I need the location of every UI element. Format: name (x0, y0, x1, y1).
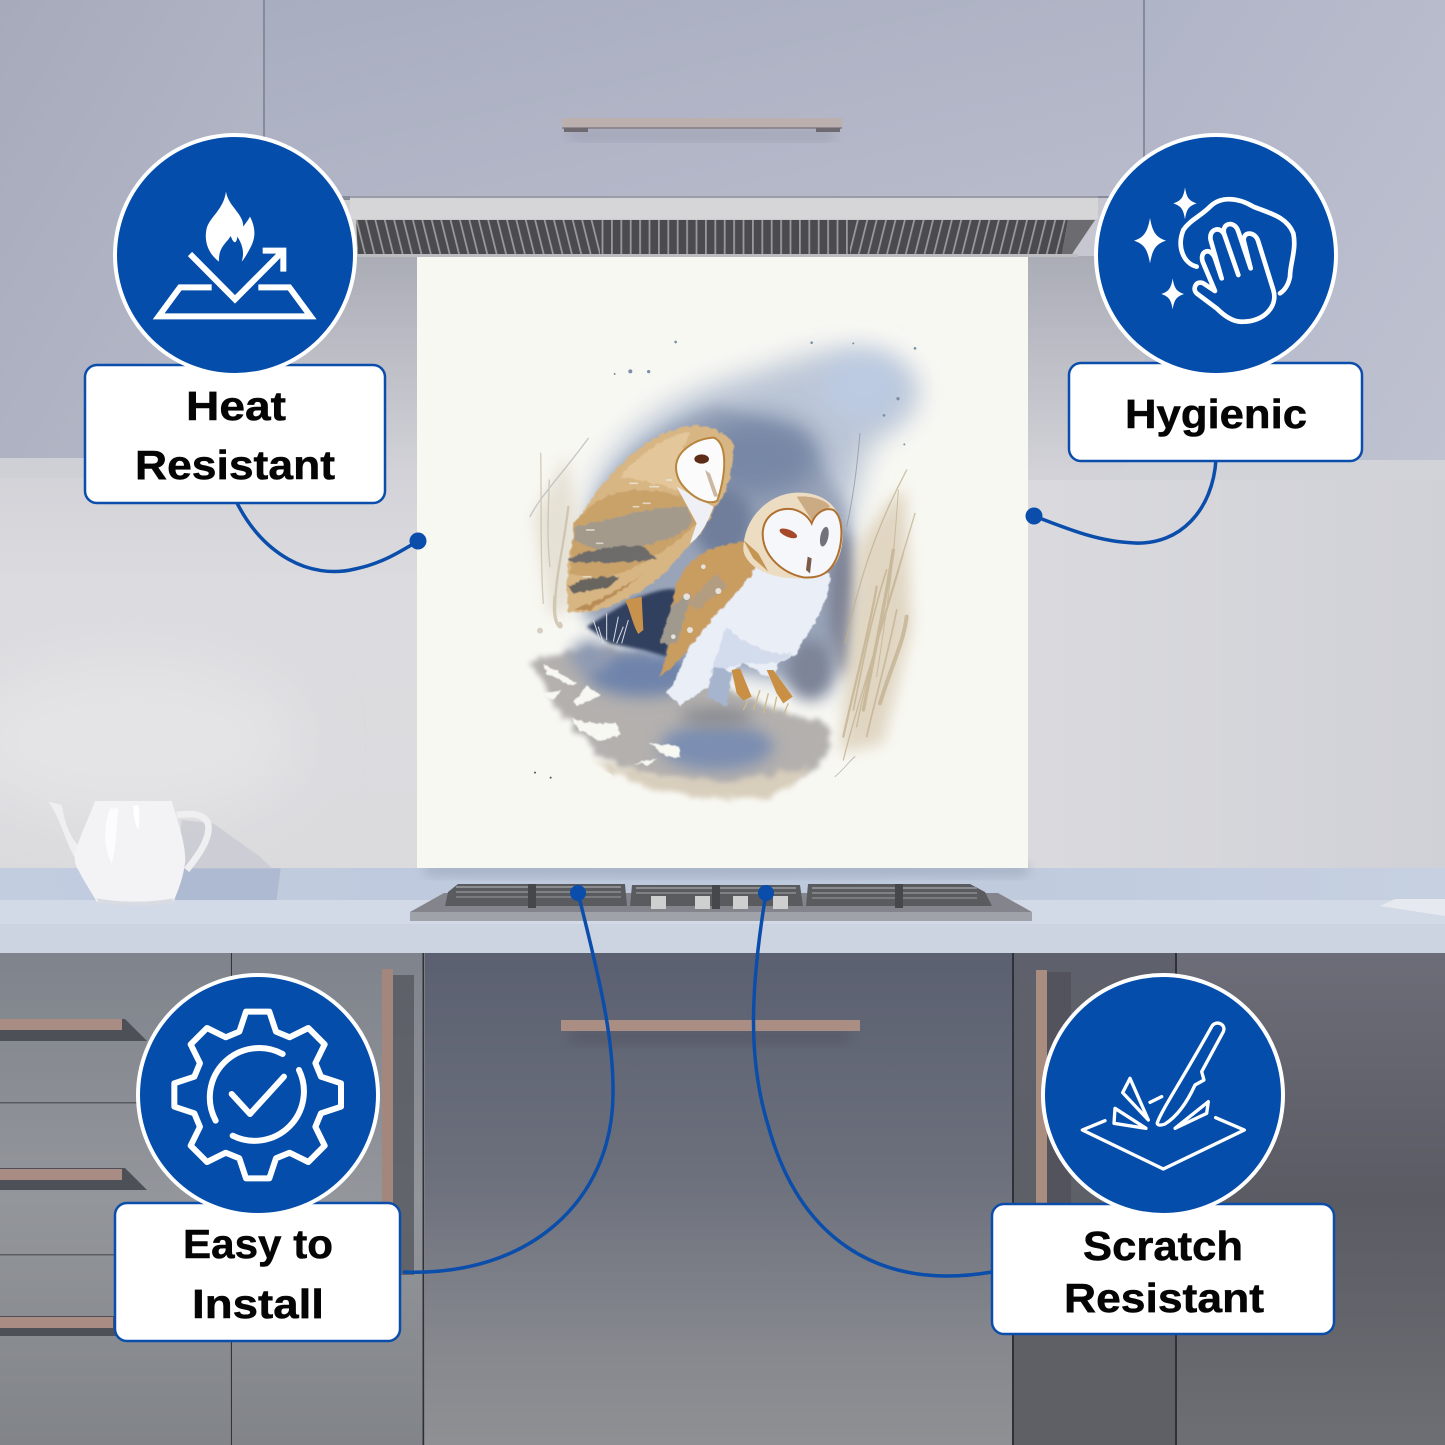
reeds right (835, 433, 915, 777)
front owl eyes (778, 526, 798, 540)
feature: scratch resistant (992, 975, 1334, 1334)
reed wash left (533, 453, 578, 617)
feature: easy to install (115, 975, 400, 1341)
dark wash (693, 417, 820, 497)
back wall (0, 250, 1445, 870)
connector: hygienic (1026, 459, 1216, 543)
grass tuft (585, 613, 628, 643)
cabinet gap (260, 0, 1150, 200)
badge circle (115, 135, 355, 375)
pan supports (528, 884, 536, 908)
teapot body (75, 801, 185, 904)
upper right blue (820, 353, 907, 420)
badge circle (1043, 975, 1283, 1215)
connector: easy to install (403, 885, 613, 1272)
teapot shadow (175, 820, 281, 900)
icon: knife on scratched surface (1082, 1023, 1244, 1169)
soft light on the wall (0, 660, 300, 820)
heading line 2: Install (192, 1281, 324, 1327)
sky wash (580, 352, 917, 693)
burners and grates (445, 884, 627, 906)
reed wash right (840, 487, 912, 753)
hob plate (410, 893, 1032, 921)
vertical handle right (1036, 970, 1047, 1204)
lower cabinet far right (1177, 953, 1445, 1445)
hood vent grille (356, 220, 600, 254)
back owl grey wing bands (573, 507, 693, 552)
heading: Hygienic (1125, 391, 1307, 437)
paper highlights on ground (540, 663, 680, 783)
dark hollow under owl (587, 589, 677, 657)
front owl head (743, 493, 843, 579)
paper (417, 257, 1028, 868)
splashback panel with owl painting (417, 257, 1028, 876)
heading: Easy to (183, 1221, 333, 1267)
drawer handles (0, 1019, 147, 1041)
back owl leg (625, 597, 643, 634)
upper cabinet right (1145, 0, 1445, 460)
teapot spout (48, 802, 80, 862)
back owl mid wing (570, 490, 697, 577)
front owl wing (660, 542, 756, 677)
badge circle (138, 975, 378, 1215)
dense wash behind owls (583, 407, 850, 683)
lower cabinet second door (232, 953, 423, 1445)
panel shadow (425, 862, 1028, 876)
wing spots (671, 564, 721, 639)
front owl (660, 542, 830, 707)
back owl (567, 426, 734, 612)
counter upstand (0, 868, 1445, 901)
gas hob (410, 884, 1032, 921)
front owl beak (806, 557, 812, 573)
reeds left (530, 438, 588, 627)
paint splatter (534, 341, 916, 779)
back owl upper back (620, 432, 690, 493)
back owl body (567, 426, 734, 612)
heading line 2: Resistant (135, 442, 335, 488)
grass at feet (743, 690, 788, 715)
upper cabinet shelf right (1110, 460, 1445, 480)
icon: gear with check mark (174, 1012, 341, 1178)
worktop edge piece (1380, 899, 1445, 916)
label box (85, 365, 385, 503)
badge circle (1096, 135, 1336, 375)
label box (115, 1203, 400, 1341)
lower cabinet left drawers (0, 953, 230, 1445)
lower cabinet centre (425, 953, 1012, 1445)
back owl feather flecks (583, 480, 671, 577)
feature: hygienic (1069, 135, 1362, 461)
icon: flame reflected from surface (159, 192, 311, 316)
front owl body (667, 550, 830, 705)
control knobs (651, 896, 666, 909)
back owl chest (677, 487, 713, 543)
wall shading on the right (1028, 480, 1445, 870)
connector: heat resistant (235, 499, 426, 572)
connector: scratch resistant (754, 885, 992, 1276)
teapot handle (177, 814, 209, 870)
watercolour barn owls (530, 341, 917, 800)
label box (992, 1204, 1334, 1334)
lower cabinet right door (1014, 953, 1175, 1445)
heading line 2: Resistant (1064, 1275, 1264, 1321)
back owl eye (694, 454, 709, 464)
heading: Scratch (1083, 1223, 1243, 1269)
front owl face (763, 509, 841, 578)
icon: hand wiping with sparkles (1134, 187, 1294, 322)
back owl face (676, 438, 724, 502)
ground wash (530, 649, 829, 786)
upper cabinet left (0, 0, 263, 458)
cabinet handle top (562, 118, 842, 140)
cooker hood (350, 196, 1143, 257)
ground tan wash (590, 757, 804, 800)
centre handle (570, 1030, 850, 1044)
ground blue washes (587, 650, 700, 697)
vertical handle (382, 969, 393, 1204)
upper cabinet middle (265, 0, 1143, 196)
label box (1069, 363, 1362, 461)
front owl legs (732, 668, 752, 701)
upper cabinet shelf left (0, 458, 90, 478)
teapot (48, 801, 281, 905)
worktop front edge (0, 924, 1445, 953)
worktop top surface (0, 900, 1445, 924)
back owl beak (705, 470, 718, 497)
heading: Heat (186, 383, 286, 429)
feature: heat resistant (85, 135, 385, 503)
